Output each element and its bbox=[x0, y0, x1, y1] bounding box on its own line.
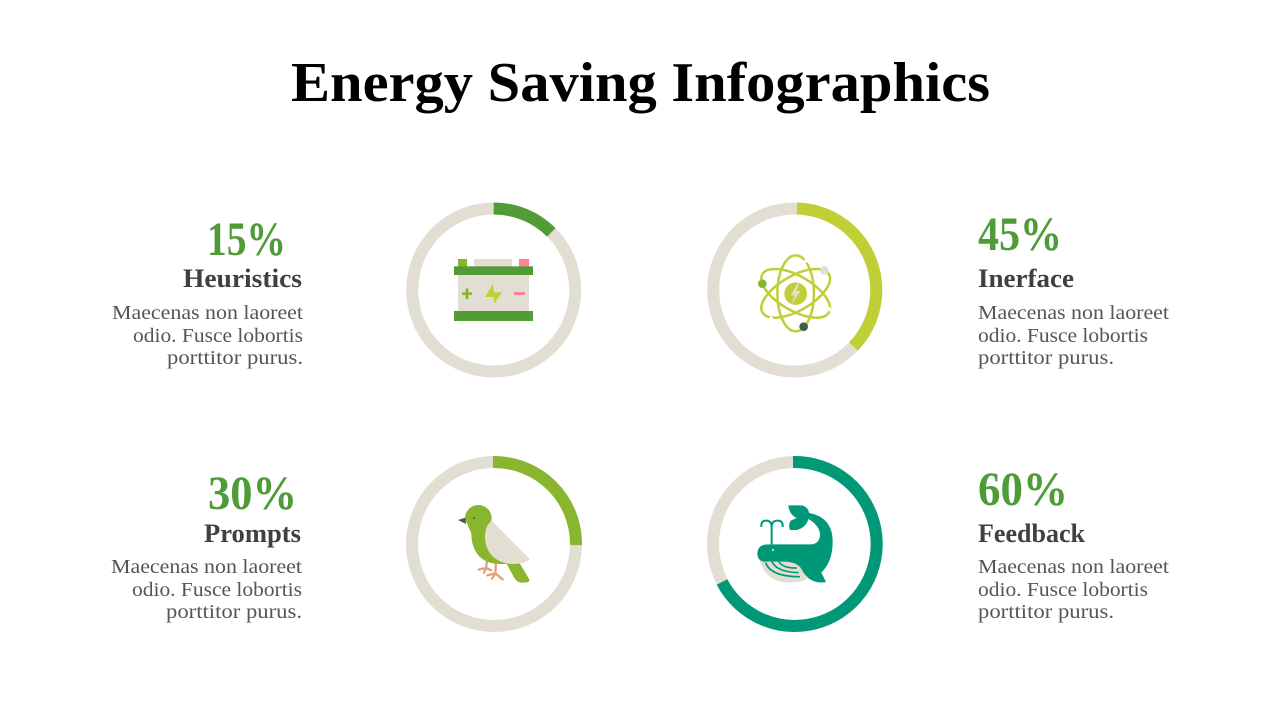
percentage 30%: 30% bbox=[208, 467, 297, 520]
description: porttitor purus. bbox=[978, 347, 1114, 369]
description: Maecenas non laoreet bbox=[112, 302, 303, 324]
panel: interface text bbox=[978, 208, 1169, 369]
percentage 15%: 15% bbox=[207, 213, 286, 266]
description: odio. Fusce lobortis bbox=[978, 579, 1148, 601]
donut track bbox=[713, 462, 877, 626]
description: porttitor purus. bbox=[167, 347, 303, 369]
heading: Inerface: Inerface bbox=[978, 264, 1074, 293]
description bbox=[978, 556, 1169, 623]
donut value 45% bbox=[797, 208, 876, 346]
heading: Prompts: Prompts bbox=[204, 519, 301, 548]
panel: feedback text bbox=[978, 463, 1169, 623]
panel: heuristics text bbox=[112, 213, 303, 369]
description: porttitor purus. bbox=[978, 601, 1114, 623]
panel: interface donut bbox=[713, 208, 876, 372]
description bbox=[978, 302, 1169, 369]
panel: heuristics donut bbox=[412, 208, 575, 372]
donut value 30% bbox=[493, 462, 576, 545]
heading: Heuristics: Heuristics bbox=[183, 264, 302, 293]
icon: bird bbox=[458, 505, 530, 583]
donut track bbox=[713, 208, 876, 372]
donut track bbox=[412, 462, 576, 626]
description bbox=[112, 302, 303, 369]
panel: prompts donut bbox=[412, 462, 576, 626]
description bbox=[111, 556, 302, 623]
description: odio. Fusce lobortis bbox=[133, 325, 303, 347]
percentage 45%: 45% bbox=[978, 208, 1062, 261]
panel: feedback donut bbox=[713, 462, 877, 626]
description: Maecenas non laoreet bbox=[978, 302, 1169, 324]
description: porttitor purus. bbox=[166, 601, 302, 623]
icon: whale bbox=[757, 505, 833, 583]
description: odio. Fusce lobortis bbox=[978, 325, 1148, 347]
donut track bbox=[412, 208, 575, 372]
percentage 60%: 60% bbox=[978, 463, 1068, 516]
title: Energy Saving Infographics bbox=[291, 52, 990, 114]
icon: battery bbox=[454, 259, 533, 321]
description: Maecenas non laoreet bbox=[111, 556, 302, 578]
donut value 15% bbox=[494, 208, 551, 232]
description: Maecenas non laoreet bbox=[978, 556, 1169, 578]
panel: prompts text bbox=[111, 467, 302, 623]
donut value 60% bbox=[722, 462, 877, 626]
description: odio. Fusce lobortis bbox=[132, 579, 302, 601]
heading: Feedback: Feedback bbox=[978, 519, 1086, 548]
icon: atom bbox=[754, 255, 838, 331]
